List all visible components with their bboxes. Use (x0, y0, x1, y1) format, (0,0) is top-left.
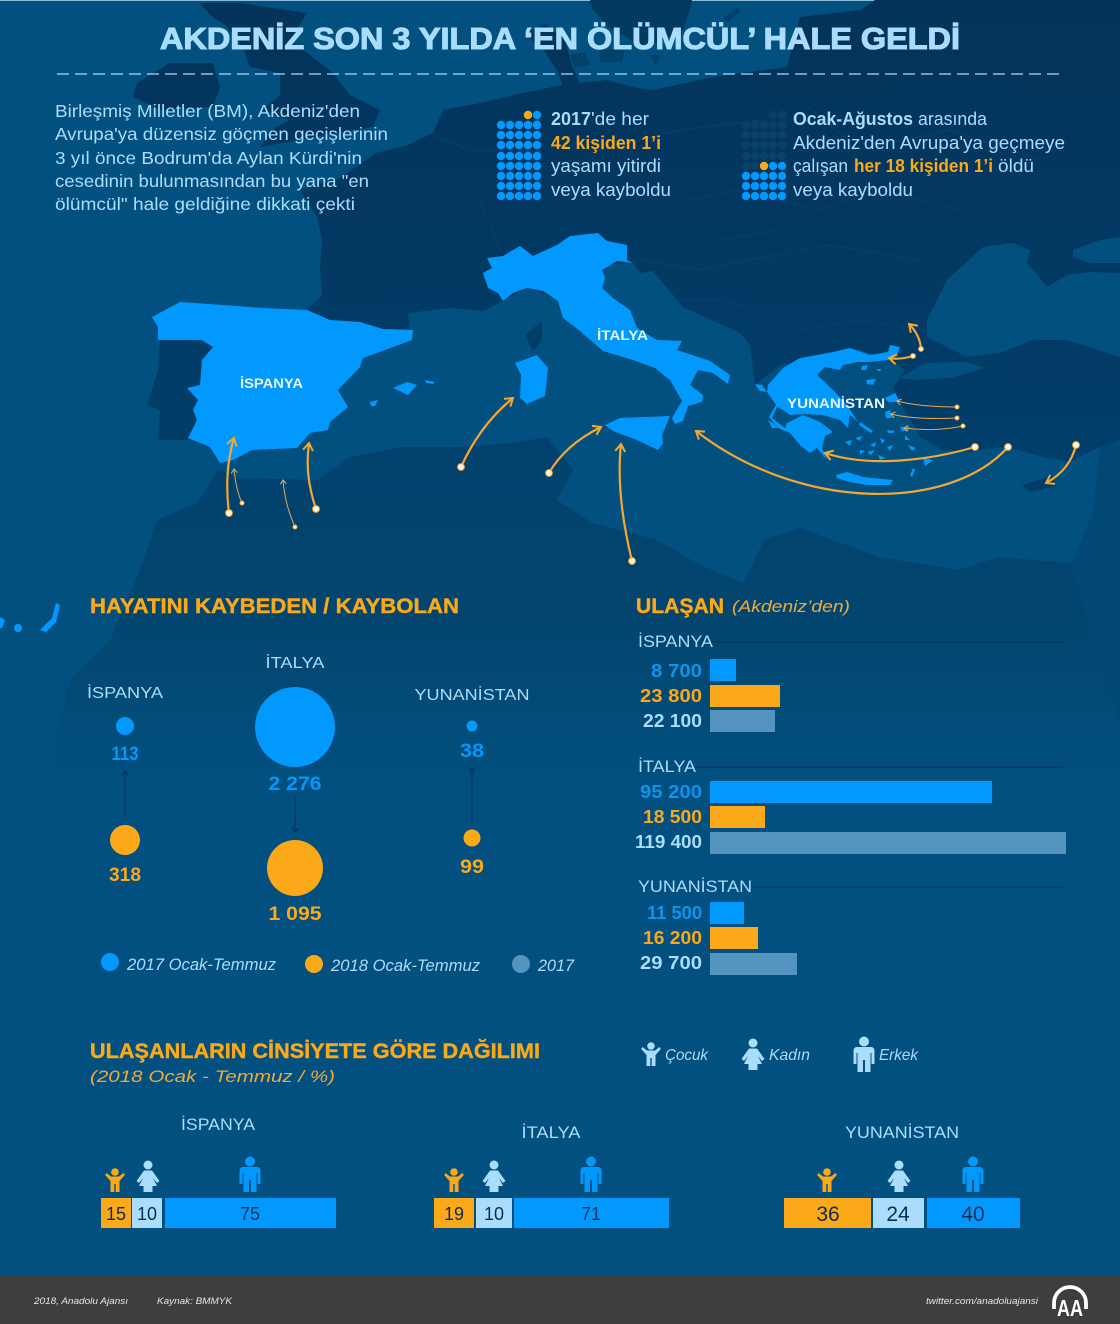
Greece bars: 29 700 (640, 953, 702, 973)
country: Spain (152, 302, 413, 463)
Spain bars: İSPANYA (638, 632, 714, 651)
label: Italy: İTALYA (597, 327, 648, 343)
gender panel: Greece: YUNANİSTAN (845, 1123, 959, 1142)
arrow start dots (226, 347, 1079, 564)
legend: 2018 Ocak-Temmuz (330, 956, 480, 975)
icon legend: Kadın (769, 1047, 810, 1064)
gender panel: Spain: 15 (106, 1204, 126, 1224)
footer (0, 1275, 1120, 1324)
gender panel: Italy: 10 (484, 1204, 504, 1224)
Italy bubbles (255, 653, 335, 925)
Greece bars: YUNANİSTAN (638, 877, 752, 896)
heading: arrivals (636, 595, 850, 618)
country: Italy (483, 233, 730, 424)
logo: Anadolu Agency: AA (1057, 1295, 1083, 1321)
gender panel: Italy: 19 (444, 1204, 464, 1224)
gender panel: Greece (784, 1123, 1020, 1228)
gender panel: Spain: İSPANYA (181, 1115, 256, 1134)
gender panel: Greece: 36 (816, 1203, 840, 1226)
Italy bars (635, 757, 1066, 854)
sea: Marmara (900, 362, 985, 380)
Spain bars: 22 100 (643, 711, 702, 731)
country borders (433, 100, 1040, 330)
land: North Africa (40, 437, 1120, 800)
Italy bars: İTALYA (638, 757, 697, 776)
heading: arrivals: ULAŞAN (636, 595, 724, 618)
Italy bubbles: 1 095 (268, 904, 322, 925)
Spain bars: 8 700 (651, 661, 702, 681)
Greece bubbles: 38 (460, 741, 484, 762)
dot icon: 1 in 42 (497, 111, 541, 200)
gender panel: Spain (101, 1115, 336, 1228)
land: north Europe and Anatolia (300, 0, 1120, 462)
gender panel: Italy (434, 1123, 669, 1228)
icon legend (641, 1036, 919, 1072)
logo: Anadolu Agency (1054, 1287, 1086, 1321)
stat: January-August: çalışan (793, 156, 848, 176)
title: AKDENİZ SON 3 YILDA ‘EN ÖLÜMCÜL’ HALE GELDİ (160, 21, 960, 56)
legend: 2017 (537, 956, 575, 975)
country: Greece (767, 345, 900, 460)
Greek islands (755, 365, 933, 485)
Greece bars: 16 200 (643, 928, 702, 948)
heading: gender distribution: (2018 Ocak - Temmuz / %) (90, 1067, 335, 1086)
heading: dead or missing: HAYATINI KAYBEDEN / KAYBOLAN (90, 595, 459, 618)
gender panel: Italy: 71 (581, 1204, 601, 1224)
Italy bars: 18 500 (643, 807, 702, 827)
icon legend: Çocuk (665, 1047, 709, 1064)
icon legend: Erkek (879, 1047, 919, 1064)
Danish islands and Gotland (570, 7, 740, 68)
Spain bubbles: İSPANYA (87, 683, 163, 702)
Sicily (605, 416, 670, 450)
Spain bubbles (87, 683, 163, 886)
footer: Kaynak: BMMYK (157, 1296, 233, 1306)
gender panel: Greece: 24 (886, 1203, 910, 1226)
land: Ireland (133, 63, 220, 110)
Greece bubbles: 99 (460, 857, 484, 878)
Spain bars: 23 800 (640, 686, 702, 706)
land: Sweden (590, 0, 692, 45)
stat: January-August: öldü (998, 156, 1034, 176)
Greece bars (638, 877, 1065, 975)
gender panel: Spain: 75 (240, 1204, 260, 1224)
migration arrows (227, 324, 1076, 561)
sea: Black Sea (927, 243, 1120, 357)
land: Portugal (147, 340, 213, 440)
dot icon: 1 in 18 (742, 111, 786, 200)
Spain bubbles: 318 (109, 865, 141, 886)
gender panel: Italy: İTALYA (522, 1123, 581, 1142)
Italy bubbles: İTALYA (266, 653, 325, 672)
Canary islands (0, 603, 60, 632)
map of the Mediterranean (0, 0, 1120, 800)
label: Greece: YUNANİSTAN (787, 395, 885, 411)
stat: 2017 (551, 109, 671, 200)
Sardinia (515, 355, 548, 404)
legend (101, 953, 575, 975)
intro text: cesedinin bulunmasından bu yana "en (55, 171, 369, 191)
heading: gender distribution: ULAŞANLARIN CİNSİYETE GÖRE DAĞILIMI (90, 1039, 540, 1063)
legend: 2017 Ocak-Temmuz (126, 955, 276, 974)
stat: 2017: 42 kişiden 1’i (551, 133, 661, 153)
intro text: Birleşmiş Milletler (BM), Akdeniz'den (55, 101, 360, 121)
land: Cyprus (1022, 476, 1056, 492)
stat: 2017: 'de her (591, 109, 649, 129)
footer: 2018, Anadolu Ajansı (33, 1296, 129, 1306)
land: United Kingdom (200, 3, 380, 147)
bar chart: arrivals (635, 632, 1066, 975)
label: Spain: İSPANYA (240, 375, 303, 391)
Italy bars: 95 200 (640, 782, 702, 802)
intro text: ölümcül" hale geldiğine dikkati çekti (55, 194, 355, 214)
stat: January-August: Ocak-Ağustos (793, 109, 913, 129)
land: Corsica (525, 321, 542, 351)
stat: 2017: 2017 (551, 109, 591, 129)
intro text: 3 yıl önce Bodrum'da Aylan Kürdi'nin (55, 148, 362, 168)
intro text: Avrupa'ya düzensiz göçmen geçişlerinin (55, 124, 388, 144)
gender panel: Greece: 40 (961, 1203, 985, 1226)
Spain bubbles: 113 (112, 744, 138, 765)
gender panel: Spain: 10 (137, 1204, 157, 1224)
Greece bubbles: YUNANİSTAN (414, 685, 530, 704)
stat: January-August (793, 109, 1065, 200)
Italy bubbles: 2 276 (268, 774, 322, 795)
land: Levant (1071, 440, 1120, 720)
Italy bars: 119 400 (635, 832, 702, 852)
Greece bars: 11 500 (647, 903, 702, 923)
heading: arrivals: (Akdeniz’den) (732, 597, 850, 616)
intro text (55, 101, 388, 214)
footer: twitter.com/anadoluajansi (926, 1296, 1039, 1306)
Balearic islands (370, 380, 435, 406)
Greece bubbles (414, 685, 530, 878)
stat: January-August: veya kayboldu (793, 180, 913, 200)
Spain bars (638, 632, 1065, 732)
sea: Azov (1073, 237, 1120, 263)
bubble chart: dead or missing (87, 653, 530, 925)
stat: January-August: Akdeniz'den Avrupa'ya geçmeye (793, 133, 1065, 153)
stat: January-August: her 18 kişiden 1’i (854, 156, 993, 176)
stat: 2017: veya kayboldu (551, 180, 671, 200)
stat: 2017: yaşamı yitirdi (551, 156, 661, 176)
heading: gender distribution (90, 1039, 540, 1086)
stat: January-August: arasında (918, 109, 988, 129)
